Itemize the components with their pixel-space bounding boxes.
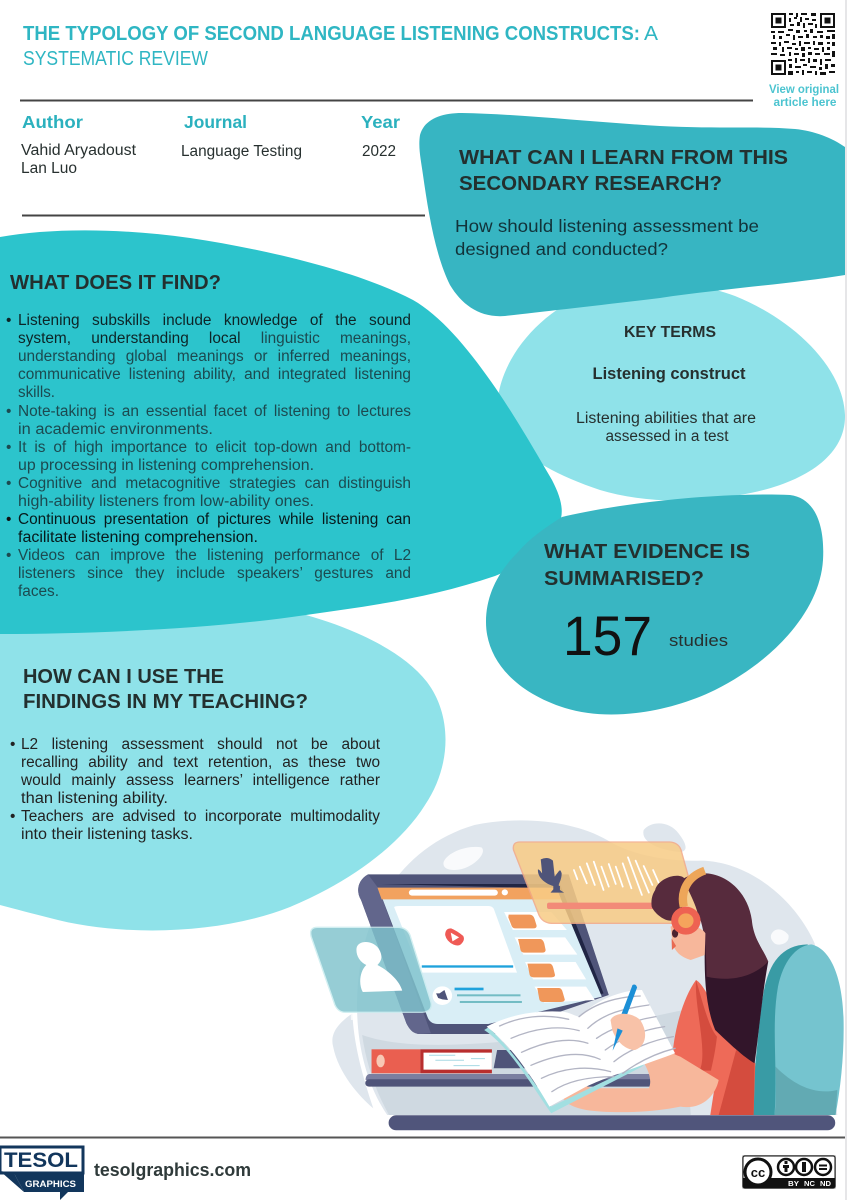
findings list: understanding global meanings or inferred meanings, [18, 348, 411, 365]
person card [311, 927, 431, 1012]
panel: author journal year: Lan Luo [21, 160, 77, 177]
findings list: Videos can improve the listening performance of L2 [18, 547, 411, 564]
findings list [6, 312, 411, 600]
panel: what can I learn: How should listening assessment be [455, 216, 759, 236]
open notebook [484, 990, 675, 1113]
teaching list: • [10, 736, 15, 753]
panel: author journal year: Author [22, 112, 83, 132]
teaching list: L2 listening assessment should not be about [21, 736, 380, 753]
findings list: • [6, 439, 11, 456]
license badge: cc [751, 1165, 765, 1180]
desk [389, 1115, 835, 1130]
teaching list: than listening ability. [21, 790, 168, 807]
panel: key terms: KEY TERMS [624, 324, 716, 341]
findings list: • [6, 403, 11, 420]
panel: author journal year: Vahid Aryadoust [21, 142, 137, 159]
shelf and books [365, 1049, 661, 1087]
panel: what does it find: WHAT DOES IT FIND? [10, 271, 221, 294]
QR caption: View original [769, 84, 839, 96]
panel: author journal year: 2022 [362, 143, 396, 160]
findings list: • [6, 475, 11, 492]
findings list: skills. [18, 384, 55, 401]
panel: key terms: Listening abilities that are [576, 410, 756, 427]
logo: TESOL Graphics: GRAPHICS [25, 1179, 76, 1190]
findings list: Continuous presentation of pictures while listening can [18, 511, 411, 528]
logo: TESOL Graphics [0, 1147, 84, 1200]
panel: what evidence [486, 495, 823, 714]
findings list: Listening subskills include knowledge of the sound [18, 312, 411, 329]
panel: key terms: assessed in a test [606, 428, 729, 445]
panel: what can I learn [419, 113, 845, 316]
teaching list: recalling ability and text retention, as these two [21, 754, 380, 771]
findings list: faces. [18, 583, 59, 600]
title: SYSTEMATIC REVIEW [23, 48, 208, 70]
panel: what does it find [0, 230, 562, 634]
findings list: in academic environments. [18, 421, 213, 438]
woman [563, 871, 768, 1115]
monitor [358, 874, 609, 1034]
license badge: NC [804, 1179, 816, 1188]
hand and pen [611, 985, 645, 1051]
findings list: Cognitive and metacognitive strategies can distinguish [18, 475, 411, 492]
panel: author journal year: Journal [184, 112, 247, 132]
panel: how can I use the findings: HOW CAN I USE THE [23, 665, 224, 688]
QR caption: article here [774, 97, 836, 109]
license badge: ND [820, 1179, 832, 1188]
teaching list: • [10, 808, 15, 825]
panel: what evidence: SUMMARISED? [544, 567, 704, 590]
panel: what evidence: studies [669, 632, 728, 650]
panel: what evidence: 157 [563, 604, 652, 667]
background blob [357, 820, 837, 1115]
findings list: listeners since they include speakers’ gestures and [18, 565, 411, 582]
audio card [513, 842, 700, 923]
teaching list: into their listening tasks. [21, 826, 193, 843]
findings list: communicative listening ability, and integrated listening [18, 366, 411, 383]
panel: author journal year: Language Testing [181, 143, 302, 160]
lower desk area [362, 1010, 691, 1115]
QR code [771, 13, 835, 75]
title [23, 23, 659, 70]
panel: author journal year [21, 112, 400, 177]
panel: what evidence: WHAT EVIDENCE IS [544, 540, 750, 563]
panel: key terms [497, 280, 845, 501]
illustration: student at computer [311, 820, 844, 1130]
QR caption [769, 84, 839, 109]
panel: what can I learn: WHAT CAN I LEARN FROM THIS [459, 146, 788, 169]
findings list: • [6, 511, 11, 528]
findings list: • [6, 312, 11, 329]
teaching list [10, 736, 380, 843]
panel: how can I use the findings [0, 609, 446, 930]
findings list: high-ability listeners from low-ability ones. [18, 493, 314, 510]
findings list: Note-taking is an essential facet of listening to lectures [18, 403, 411, 420]
chair [747, 944, 844, 1115]
title: THE TYPOLOGY OF SECOND LANGUAGE LISTENING CONSTRUCTS: [23, 23, 640, 45]
teaching list: Teachers are advised to incorporate multimodality [21, 808, 380, 825]
panel: author journal year: Year [361, 112, 400, 132]
license badge [742, 1155, 836, 1189]
license badge: BY [788, 1179, 799, 1188]
title: A [644, 23, 659, 45]
website: tesolgraphics.com [94, 1160, 251, 1180]
findings list: system, understanding local linguistic meanings, [18, 330, 411, 347]
findings list: • [6, 547, 11, 564]
panel: how can I use the findings: FINDINGS IN MY TEACHING? [23, 690, 308, 713]
panel: what can I learn: SECONDARY RESEARCH? [459, 172, 722, 195]
logo: TESOL Graphics: TESOL [4, 1149, 78, 1172]
findings list: up processing in listening comprehension. [18, 457, 314, 474]
findings list: It is of high importance to elicit top-down and bottom- [18, 439, 411, 456]
panel: what can I learn: designed and conducted? [455, 239, 668, 259]
teaching list: would mainly assess learners’ intelligence rather [21, 772, 380, 789]
panel: key terms: Listening construct [592, 365, 746, 383]
findings list: facilitate listening comprehension. [18, 529, 258, 546]
